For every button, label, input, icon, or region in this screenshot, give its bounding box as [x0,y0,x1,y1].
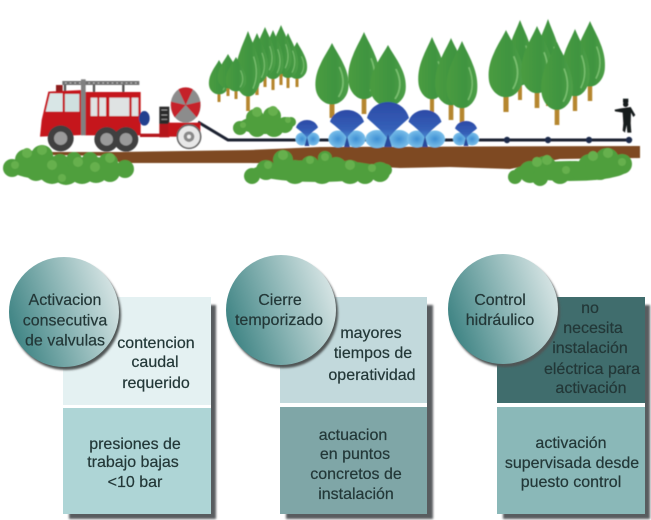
ground strip [50,146,640,169]
icon: fire truck with hose reel [40,79,201,152]
text: mayores tiempos de operatividad: operatividad [328,367,416,384]
text: actuacion en puntos concretos: actuacion [319,427,387,444]
panel: cierre temporizado [226,255,433,519]
text: actuacion en puntos concretos: instalación [318,486,394,503]
circle shadow [228,258,338,368]
panel: control hidraulico [448,254,650,519]
icon: walking person [615,99,635,133]
text: presiones de trabajo bajas: presiones de [89,436,181,453]
text: actuacion en puntos concretos [310,427,402,503]
text: no necesita instalacion electrica [544,300,640,397]
text: presiones de trabajo bajas [87,436,181,491]
text: no necesita instalacion electrica: instalación [552,340,628,357]
bushes [3,106,632,186]
text: presiones de trabajo bajas: <10 bar [108,474,163,491]
box: activacion supervisada [497,407,645,514]
box: presiones de trabajo [63,408,211,514]
circle heading [448,254,558,364]
text: contencion caudal requerido: requerido [122,375,190,392]
text: circle label: hidráulico [466,312,534,329]
text: contencion caudal requerido: contencion [117,335,195,352]
text: circle label [23,292,107,350]
text: mayores tiempos de operatividad: mayores [340,325,402,342]
text: actuacion en puntos concretos: en puntos [320,446,390,463]
hose line [198,122,632,143]
text: mayores tiempos de operatividad [328,325,416,384]
text: circle label: consecutiva [23,312,107,330]
text: activacion supervisada desde puesto control: puesto control [521,474,621,491]
text: contencion caudal requerido: caudal [131,354,179,371]
text: no necesita instalacion electrica: activación [555,380,627,397]
text: no necesita instalacion electrica: no [581,300,599,317]
circle shadow [11,260,121,370]
box: actuacion en puntos [280,407,427,514]
circle shadow [450,257,560,367]
text: presiones de trabajo bajas: trabajo bajas [87,454,179,471]
text: actuacion en puntos concretos: concretos de [310,466,402,483]
text: no necesita instalacion electrica: necesita [563,320,623,337]
illustration: fire truck, hose line and forest [3,19,640,186]
circle heading [9,257,119,367]
text: circle label: Activacion [29,292,101,309]
text: circle label: Cierre [258,292,302,309]
text: no necesita instalacion electrica: eléctrica para [544,361,640,378]
panel: activacion consecutiva [9,257,216,519]
text: circle label [466,292,534,329]
circle heading [226,255,336,365]
text: circle label: Control [474,292,526,309]
text: circle label: temporizado [235,312,323,329]
text: circle label [235,292,323,329]
box: mayores tiempos [280,297,427,403]
text: activacion supervisada desde puesto control: supervisada desde [505,455,639,472]
text: contencion caudal requerido [117,335,195,392]
small tree cluster [209,25,307,111]
text: activacion supervisada desde puesto control: activación [535,435,607,452]
text: circle label: de valvulas [25,332,105,350]
box: contencion caudal [63,297,211,405]
tall trees [315,19,605,125]
text: activacion supervisada desde puesto control [505,435,639,491]
box: no necesita instalacion [497,297,645,403]
water sprinklers [296,102,479,148]
text: mayores tiempos de operatividad: tiempos de [334,345,412,362]
